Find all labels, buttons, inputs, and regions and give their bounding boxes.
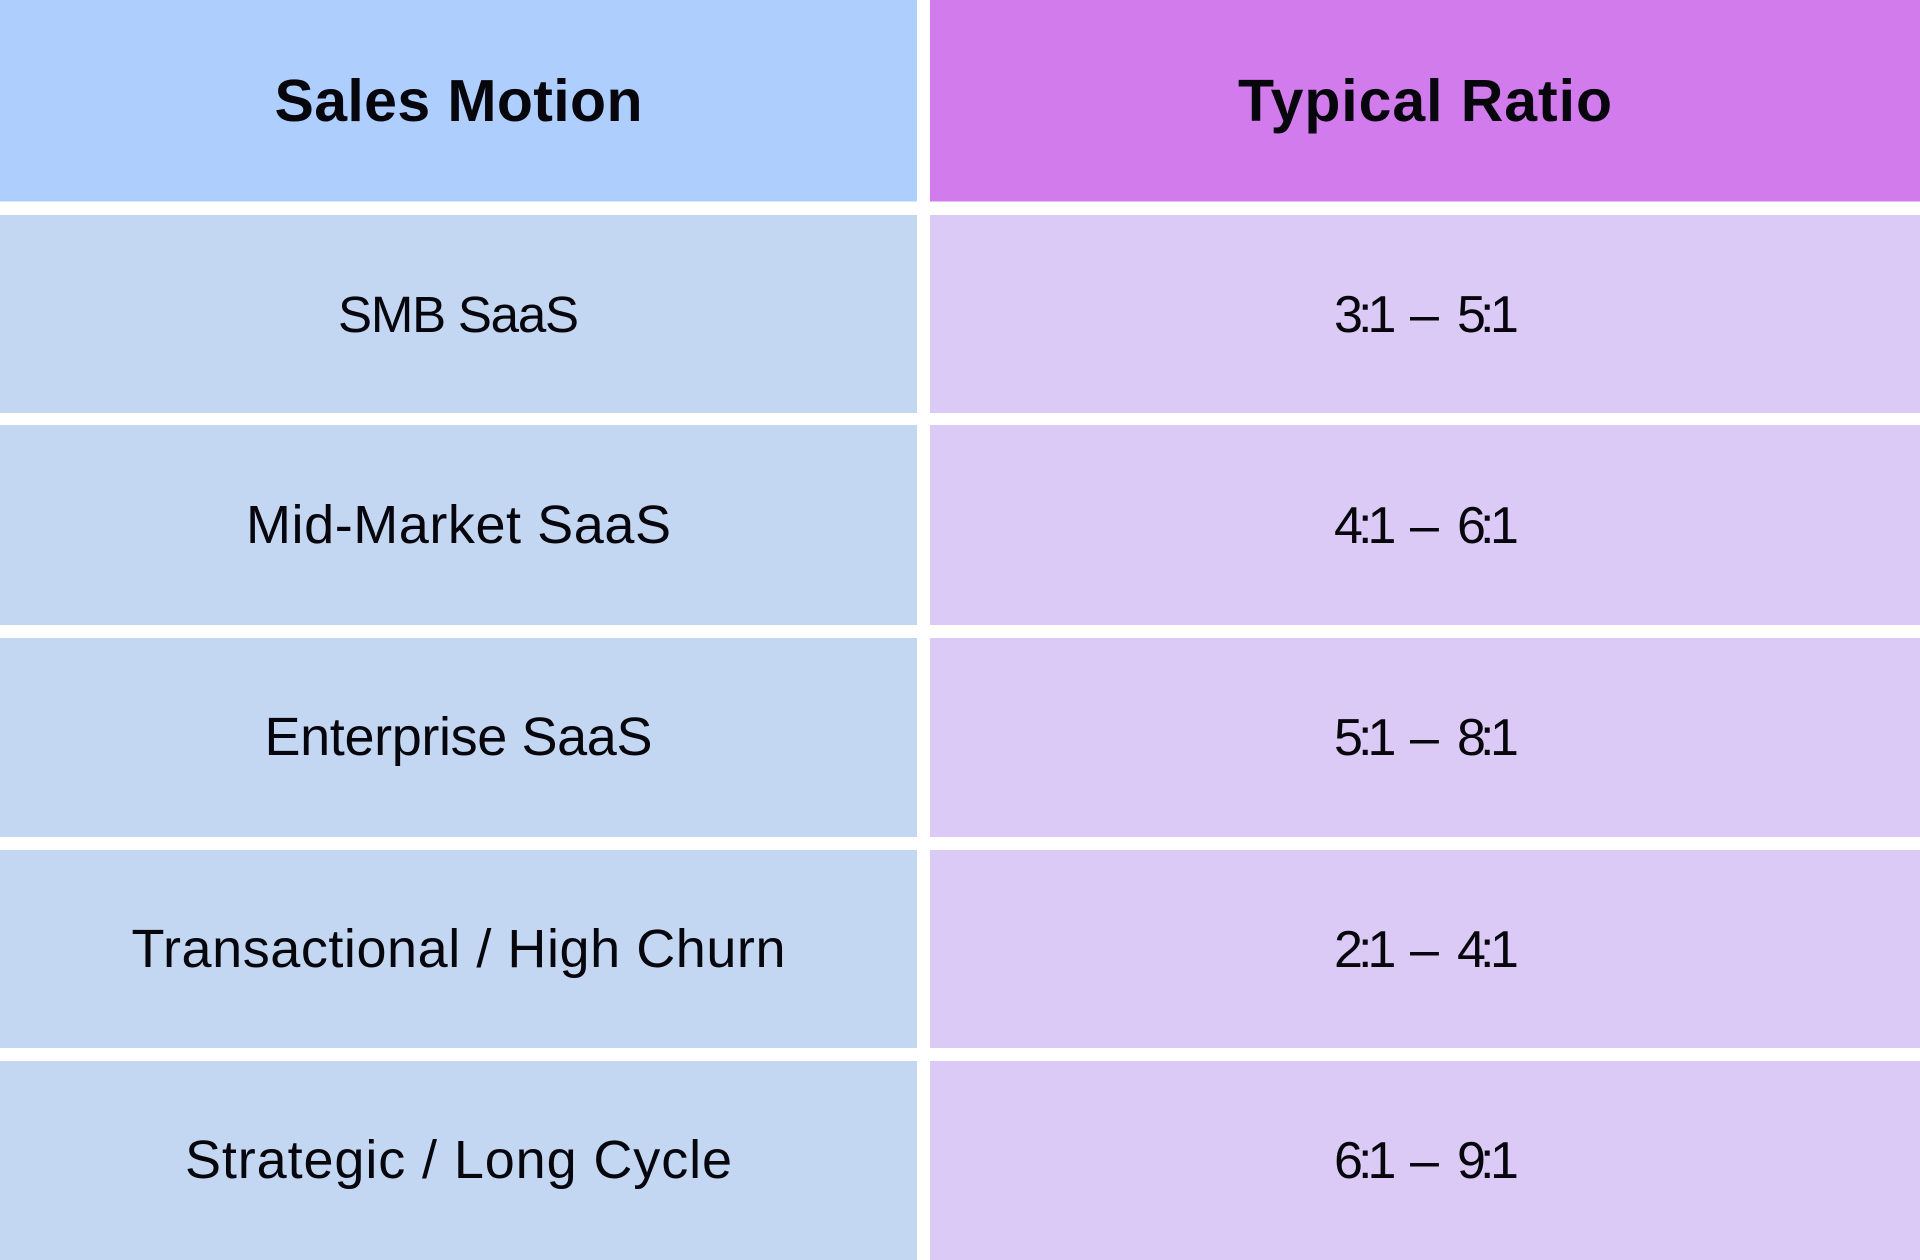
header: typical ratio: Typical Ratio [1238, 68, 1612, 134]
row 2 label: Mid-Market SaaS [0, 425, 917, 625]
row 1 value: 3:1 – 5:1 [1334, 286, 1519, 344]
header: sales motion [0, 0, 917, 202]
row 3 label: Enterprise SaaS: Enterprise SaaS [264, 707, 652, 767]
row 5 value [930, 1061, 1920, 1260]
row 4 value [930, 850, 1920, 1048]
row 1 value [930, 215, 1920, 413]
row 3 label: Enterprise SaaS [0, 638, 917, 837]
row 1 label: SMB SaaS [0, 215, 917, 413]
row 4 value: 2:1 – 4:1 [1334, 921, 1519, 979]
row 5 label: Strategic / Long Cycle [0, 1061, 917, 1260]
row 2 label: Mid-Market SaaS: Mid-Market SaaS [246, 495, 671, 555]
row 4 label: Transactional / High Churn [0, 850, 917, 1048]
row 5 label: Strategic / Long Cycle: Strategic / Long Cycle [185, 1130, 732, 1190]
row 2 value: 4:1 – 6:1 [1334, 497, 1519, 555]
header: typical ratio [930, 0, 1920, 202]
row 1 label: SMB SaaS: SMB SaaS [338, 286, 579, 343]
row 4 label: Transactional / High Churn: Transactional / High Churn [132, 919, 786, 979]
header: sales motion: Sales Motion [274, 68, 642, 134]
row 3 value: 5:1 – 8:1 [1334, 709, 1519, 767]
row 3 value [930, 638, 1920, 837]
row 2 value [930, 425, 1920, 625]
row 5 value: 6:1 – 9:1 [1334, 1132, 1519, 1190]
